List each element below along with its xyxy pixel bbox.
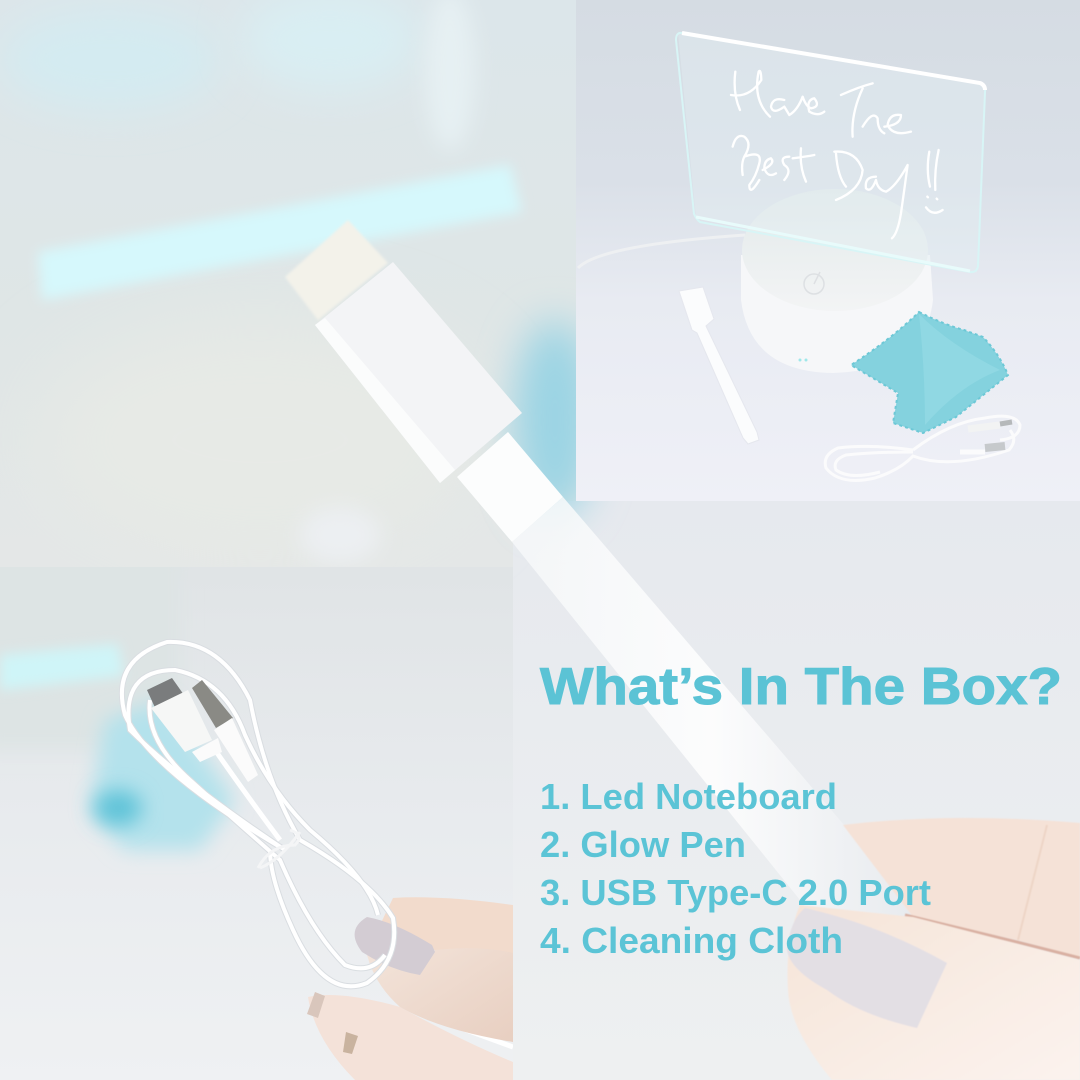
icon: coiled white cable with connectors — [122, 642, 394, 986]
text block: contents list: 3. USB Type-C 2.0 Port — [540, 872, 931, 913]
title: What’s In The Box? — [540, 658, 1062, 716]
eraser foam tip — [285, 220, 388, 320]
icon: big white pen with eraser tip — [285, 220, 913, 917]
icon: round lamp base — [741, 229, 933, 373]
pen barrel — [512, 497, 913, 917]
text block: contents list: 2. Glow Pen — [540, 824, 746, 865]
icon: acrylic noteboard with handwriting — [676, 33, 985, 273]
text block: contents list: 1. Led Noteboard — [540, 776, 837, 817]
thumb — [788, 905, 1080, 1080]
text block: contents list: 4. Cleaning Cloth — [540, 920, 843, 961]
pen cap — [315, 262, 522, 483]
icon: white marker pen — [679, 287, 759, 444]
small nails — [307, 992, 325, 1018]
icon: blue cleaning cloth — [851, 312, 1008, 433]
icon: usb power wire — [578, 235, 745, 268]
thumb nail — [787, 908, 947, 1028]
pen neck — [457, 432, 563, 542]
panel: bottom-left cable photo — [0, 550, 513, 1080]
icon: hand holding cable — [307, 897, 513, 1080]
thumb nail — [355, 917, 435, 975]
upper finger — [843, 818, 1080, 957]
white cable strand — [466, 1032, 513, 1049]
panel: top-right product photo — [576, 0, 1080, 501]
icon: coiled usb cable — [825, 416, 1020, 480]
text block: contents list — [540, 776, 931, 961]
icon: hand holding big pen — [787, 818, 1080, 1080]
upper finger — [380, 897, 513, 953]
lower fingers — [308, 995, 513, 1080]
icon: usb connectors — [147, 678, 258, 782]
thumb — [367, 948, 513, 1042]
